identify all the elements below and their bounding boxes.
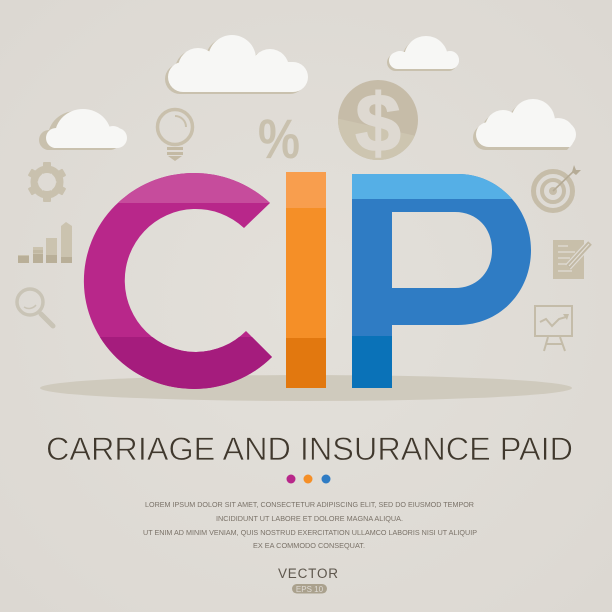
icon: bar chart	[18, 222, 72, 263]
icon: target with arrow	[534, 165, 581, 210]
icon: percent sign: %	[258, 107, 300, 170]
cloud: top right	[387, 36, 459, 71]
icon: presentation board	[535, 306, 572, 351]
title: CARRIAGE AND INSURANCE PAID	[46, 431, 573, 467]
decorative colour dots	[286, 474, 330, 484]
icon: magnifying glass	[17, 289, 53, 326]
icon: notepad and pencil	[553, 240, 590, 279]
body text	[143, 500, 477, 550]
icon: dollar coin: $	[355, 78, 401, 169]
vector label: VECTOR	[278, 566, 338, 581]
body text: EX EA COMMODO CONSEQUAT.	[253, 541, 365, 550]
body text: UT ENIM AD MINIM VENIAM, QUIS NOSTRUD EXERCITATION ULLAMCO LABORIS NISI UT ALIQUIP	[143, 528, 477, 537]
EPS 10 badge	[292, 584, 327, 594]
cloud: top centre	[165, 35, 308, 94]
EPS 10 badge: EPS 10	[296, 585, 324, 594]
letter P	[350, 172, 535, 390]
icon: gear	[28, 162, 66, 202]
icon: dollar coin	[338, 80, 418, 160]
letter I	[286, 172, 326, 388]
letter C	[80, 170, 280, 392]
body text: INCIDIDUNT UT LABORE ET DOLORE MAGNA ALIQUA.	[216, 514, 403, 523]
icon: light bulb	[158, 110, 192, 161]
cloud: right	[473, 99, 576, 155]
body text: LOREM IPSUM DOLOR SIT AMET, CONSECTETUR ADIPISCING ELIT, SED DO EIUSMOD TEMPOR	[145, 500, 475, 509]
cloud: upper left	[39, 109, 127, 150]
ground shadow ellipse	[40, 375, 572, 401]
